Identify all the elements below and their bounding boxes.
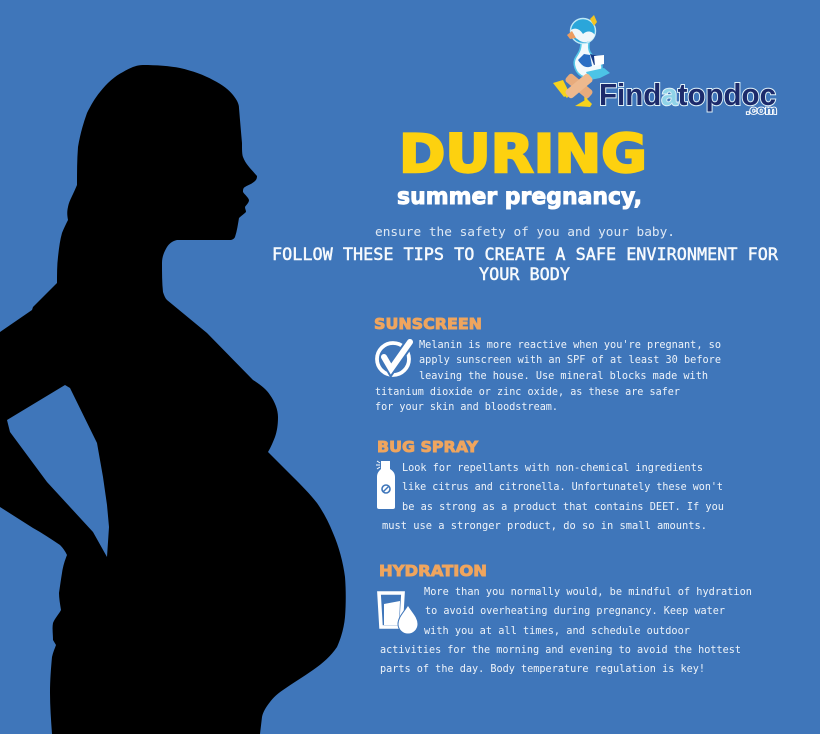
subtitle: summer pregnancy: summer pregnancy,: [397, 184, 642, 210]
logo: Findatopdoc: [553, 15, 777, 117]
text: hydration tip: to avoid overheating during pregnancy. Keep water: [425, 605, 725, 617]
text: bug spray tip: like citrus and citronella. Unfortunately these won't: [402, 481, 723, 493]
text: bug spray tip: Look for repellants with non-chemical ingredients: [402, 462, 703, 474]
icon: water glass and drop: [379, 593, 418, 634]
text: sunscreen tip: [375, 339, 721, 413]
text: bug spray tip: must use a stronger product, do so in small amounts.: [382, 520, 707, 532]
heading: follow these tips: [272, 244, 779, 284]
text: sunscreen tip: titanium dioxide or zinc oxide, as these are safer: [375, 386, 680, 398]
text: hydration tip: parts of the day. Body temperature regulation is key!: [380, 663, 705, 675]
text: bug spray tip: be as strong as a product that contains DEET. If you: [402, 501, 724, 513]
logo .com: .com: [746, 103, 777, 117]
panel: hydration: [379, 562, 752, 675]
text: sunscreen tip: apply sunscreen with an SPF of at least 30 before: [419, 354, 721, 366]
icon: spray bottle: [376, 461, 395, 509]
heading: sunscreen: SUNSCREEN: [374, 315, 482, 333]
text: hydration tip: activities for the morning and evening to avoid the hottest: [380, 644, 741, 656]
text: hydration tip: [380, 586, 752, 675]
text: sunscreen tip: Melanin is more reactive when you're pregnant, so: [419, 339, 721, 351]
text: sunscreen tip: for your skin and bloodstream.: [375, 401, 558, 413]
logo wordmark: Findatopdoc: [599, 77, 776, 112]
icon: check mark in circle: [377, 342, 410, 375]
heading: follow these tips: FOLLOW THESE TIPS TO CREATE A SAFE ENVIRONMENT FOR: [272, 244, 779, 264]
heading: bug spray: BUG SPRAY: [377, 438, 479, 456]
title: DURING: DURING: [399, 124, 647, 185]
heading: hydration: HYDRATION: [379, 562, 487, 580]
text: hydration tip: with you at all times, and schedule outdoor: [424, 625, 690, 637]
panel: sunscreen: [374, 315, 721, 413]
icon: duck mascot: [553, 15, 610, 107]
text: hydration tip: More than you normally would, be mindful of hydration: [424, 586, 752, 598]
heading: follow these tips: YOUR BODY: [479, 264, 570, 284]
panel: bug spray: [376, 438, 724, 532]
intro line: ensure the safety of you and your baby.: [375, 224, 675, 239]
pregnant woman silhouette: [0, 65, 346, 734]
text: sunscreen tip: leaving the house. Use mineral blocks made with: [419, 370, 708, 382]
text: bug spray tip: [382, 462, 724, 532]
